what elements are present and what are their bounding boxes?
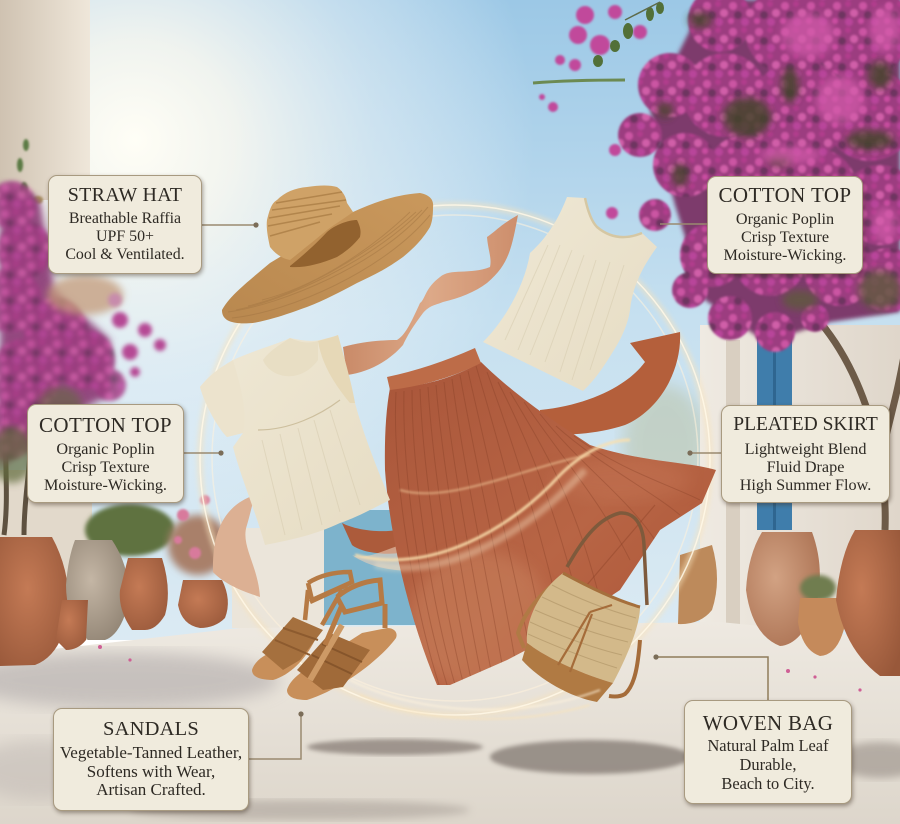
cotton top, left bbox=[200, 335, 390, 545]
terrace floor bbox=[0, 622, 900, 824]
label: straw hat: Cool & Ventilated. bbox=[65, 246, 185, 263]
label: straw hat bbox=[48, 175, 202, 274]
label: woven bag: WOVEN BAG bbox=[703, 711, 833, 735]
connector: cotton top left bbox=[183, 450, 224, 456]
pleated skirt bbox=[355, 348, 716, 690]
right bougainvillea tree bbox=[533, 0, 900, 530]
right building with blue window bbox=[700, 325, 900, 630]
label: pleated skirt: Fluid Drape bbox=[767, 458, 844, 476]
label: pleated skirt: Lightweight Blend bbox=[745, 440, 866, 458]
scarf ribbon bbox=[213, 215, 680, 597]
left sandal sole bbox=[252, 640, 315, 680]
left wall bbox=[0, 0, 324, 640]
connector: pleated skirt bbox=[687, 450, 721, 456]
label: straw hat: STRAW HAT bbox=[68, 184, 182, 206]
glowing orbit ring bbox=[200, 205, 710, 715]
label: cotton top left bbox=[27, 404, 184, 503]
label: cotton top right: Crisp Texture bbox=[741, 228, 829, 246]
label: sandals bbox=[53, 708, 249, 811]
sea horizon bbox=[322, 510, 417, 625]
label: woven bag: Beach to City. bbox=[721, 774, 815, 793]
label: straw hat: Breathable Raffia bbox=[69, 210, 181, 227]
connector: cotton top right bbox=[660, 223, 707, 225]
label: sandals: Artisan Crafted. bbox=[96, 780, 206, 799]
label: sandals: SANDALS bbox=[103, 718, 199, 740]
label: cotton top right: COTTON TOP bbox=[719, 183, 851, 207]
woven bag bbox=[518, 513, 647, 702]
distant hazy tree behind the skirt bbox=[623, 385, 707, 505]
cotton top, right bbox=[483, 197, 657, 391]
label: cotton top right: Moisture-Wicking. bbox=[724, 246, 846, 264]
label: cotton top right bbox=[707, 176, 863, 274]
right sandal sole bbox=[287, 628, 397, 700]
label: pleated skirt: PLEATED SKIRT bbox=[733, 414, 878, 435]
straw hat bbox=[222, 186, 433, 323]
terracotta pots and plants left bbox=[0, 495, 228, 666]
label: sandals: Softens with Wear, bbox=[87, 762, 215, 780]
left bougainvillea bbox=[0, 139, 166, 535]
label: cotton top left: Organic Poplin bbox=[56, 440, 155, 458]
label: pleated skirt bbox=[721, 405, 890, 503]
glowing ring lower strands bbox=[350, 680, 600, 719]
label: straw hat: UPF 50+ bbox=[96, 228, 154, 245]
label: pleated skirt: High Summer Flow. bbox=[740, 476, 871, 494]
connector: woven bag bbox=[653, 654, 768, 700]
label: cotton top left: Crisp Texture bbox=[61, 458, 150, 476]
label: cotton top left: COTTON TOP bbox=[39, 413, 172, 437]
connector: straw hat bbox=[202, 222, 259, 228]
label: sandals: Vegetable-Tanned Leather, bbox=[60, 743, 242, 762]
connector: sandals bbox=[248, 711, 304, 759]
label: woven bag: Natural Palm Leaf bbox=[707, 736, 829, 755]
label: woven bag: Durable, bbox=[740, 755, 796, 774]
sky background bbox=[0, 0, 900, 640]
terracotta pots right bbox=[678, 530, 900, 676]
sun glow bbox=[0, 0, 640, 600]
label: cotton top left: Moisture-Wicking. bbox=[44, 476, 167, 494]
sandals bbox=[252, 572, 397, 700]
label: cotton top right: Organic Poplin bbox=[736, 210, 834, 228]
label: woven bag bbox=[684, 700, 852, 804]
right sandal woven straps bbox=[297, 633, 370, 690]
left sandal ankle straps bbox=[305, 572, 352, 625]
left sandal woven straps bbox=[262, 617, 323, 670]
right sandal ankle straps bbox=[325, 580, 385, 645]
